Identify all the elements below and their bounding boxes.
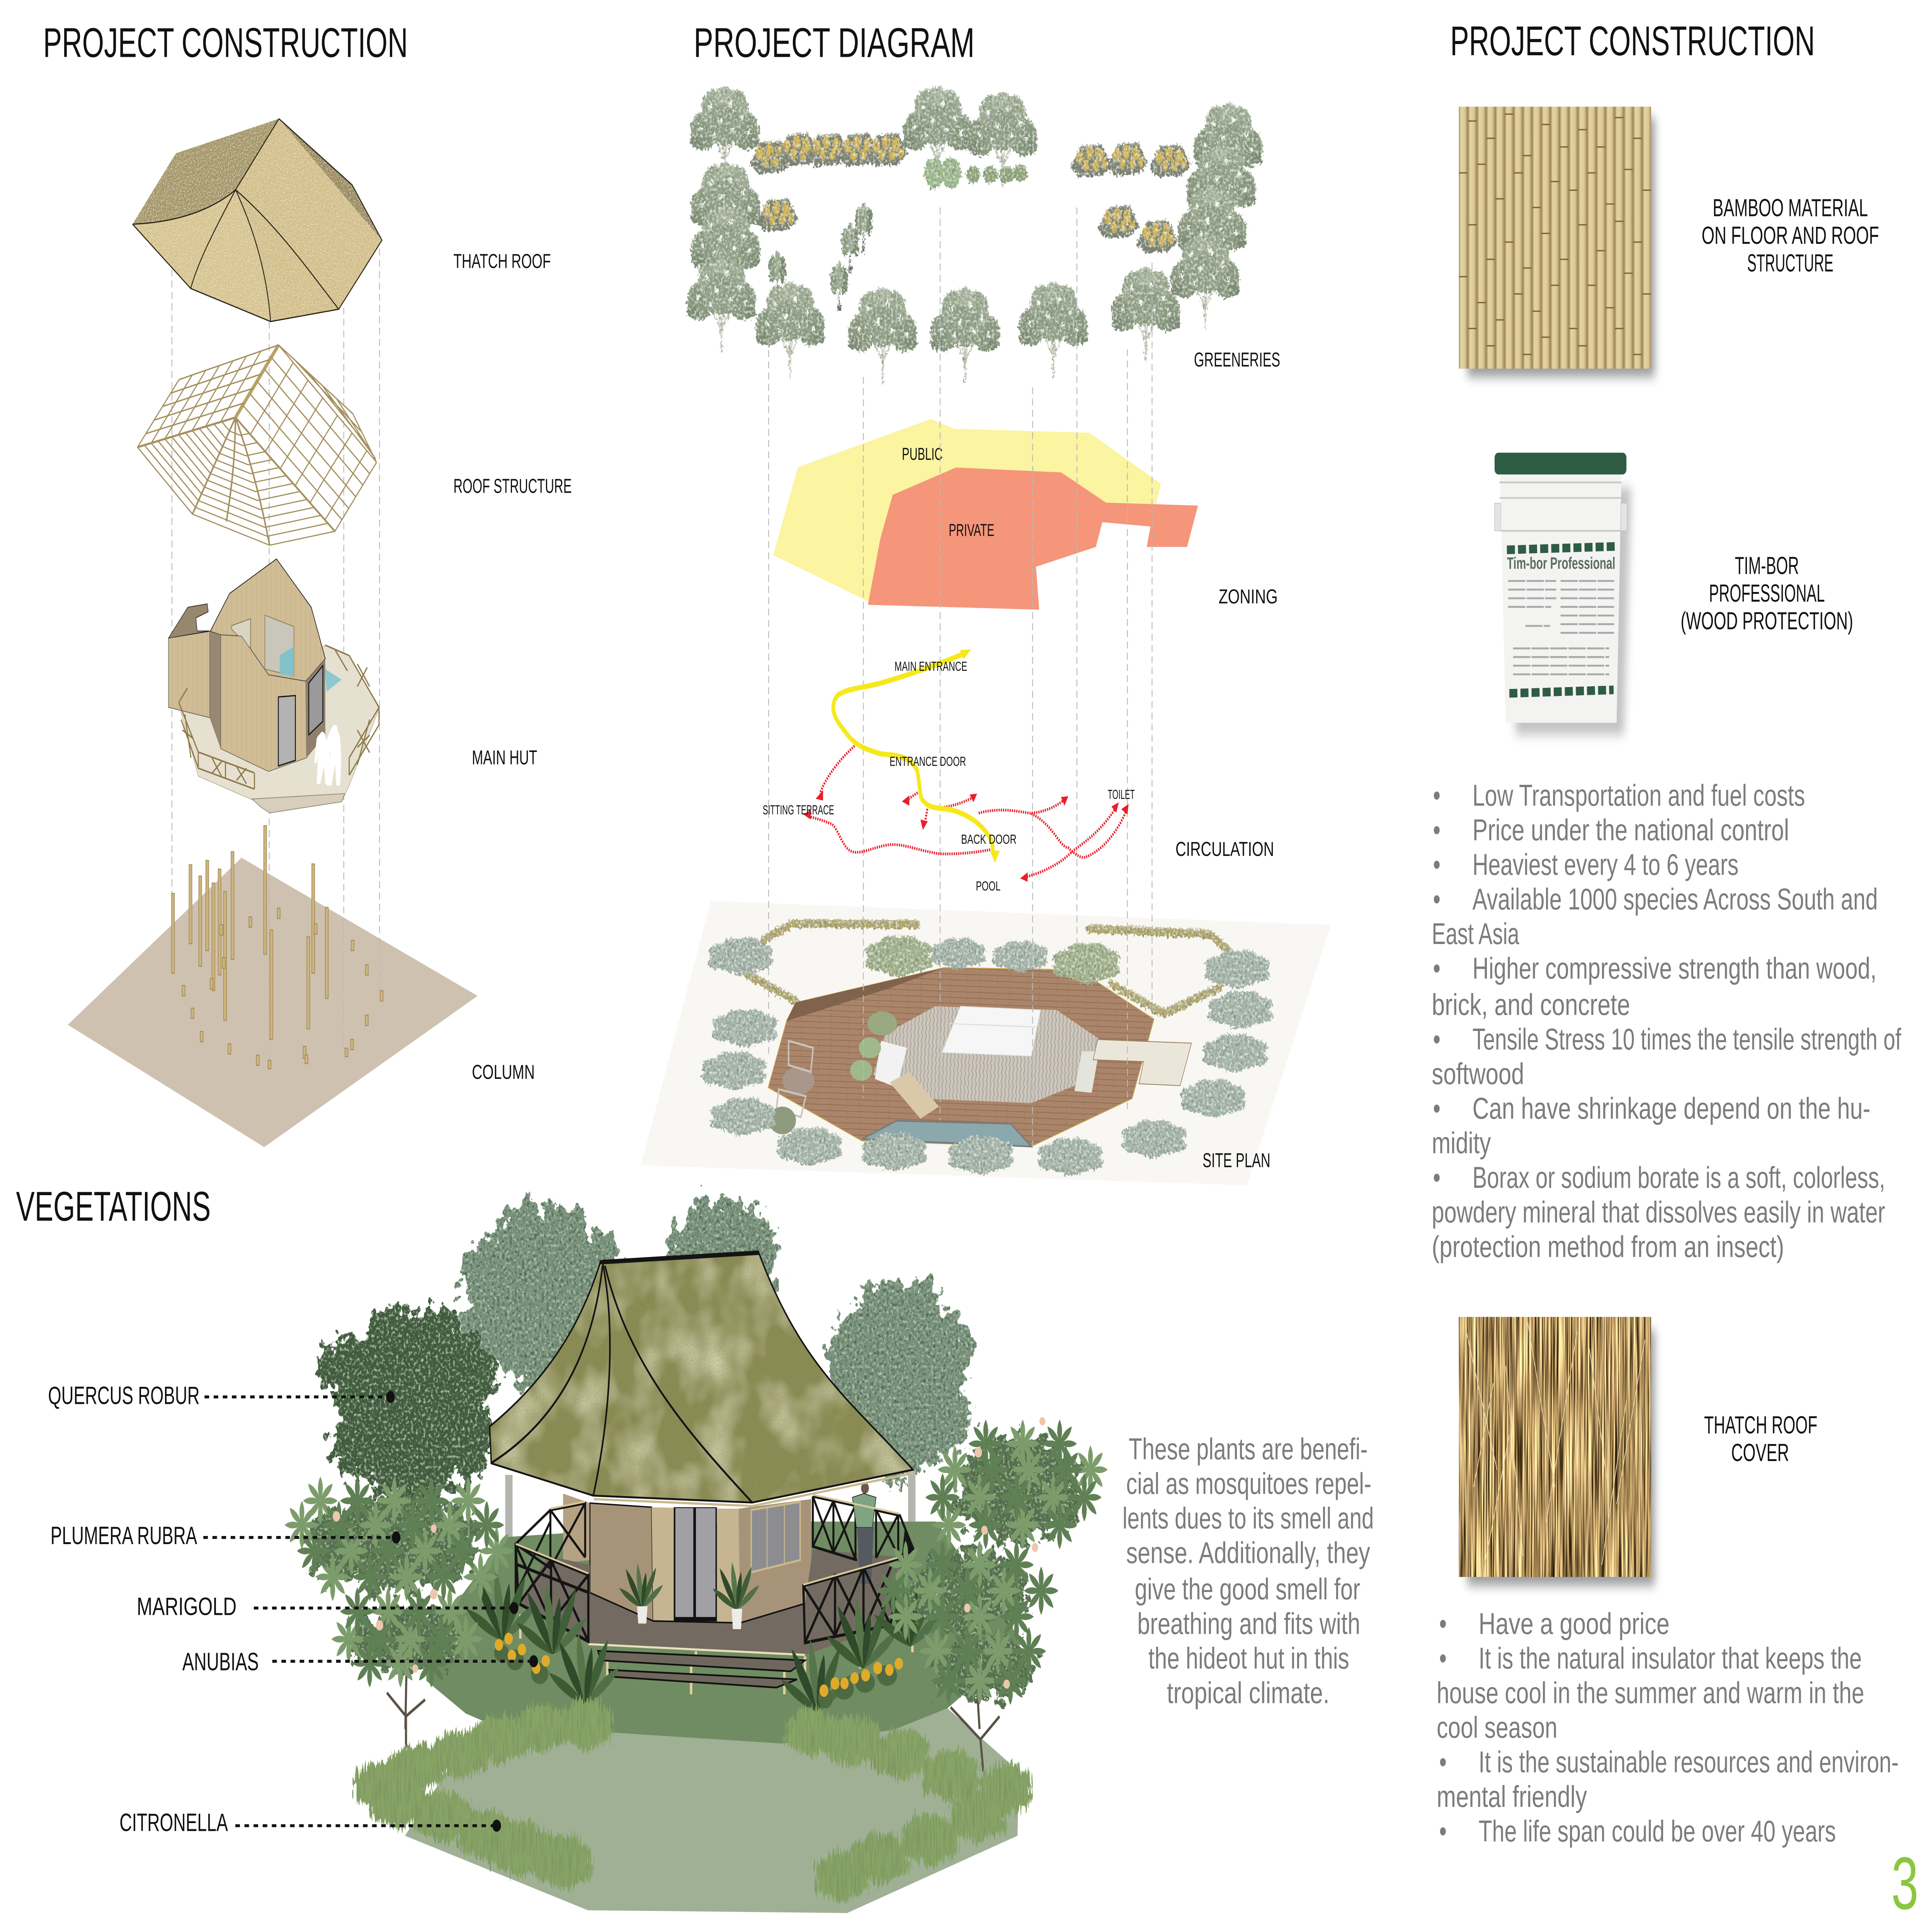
- text block: bamboo properties: East Asia: [1432, 917, 1519, 951]
- pool: [862, 1121, 1031, 1146]
- label: bamboo material: BAMBOO MATERIAL: [1713, 194, 1868, 221]
- railing cap: [516, 1495, 903, 1585]
- circulation: yellow main route: [833, 649, 1000, 863]
- text block: bamboo properties: •: [1433, 951, 1440, 985]
- stilts: [520, 1614, 912, 1694]
- text block: plants description: breathing and fits with: [1137, 1607, 1360, 1641]
- text block: bamboo properties: Available 1000 species Across South and: [1473, 882, 1878, 916]
- greeneries layer: [687, 86, 1263, 383]
- text block: thatch properties: •: [1439, 1745, 1447, 1779]
- text block: plants description: give the good smell for: [1135, 1572, 1360, 1606]
- text block: thatch properties: It is the natural insulator that keeps the: [1479, 1641, 1862, 1675]
- zoning shapes: PUBLIC: [902, 445, 942, 464]
- text block: thatch properties: Have a good price: [1479, 1607, 1670, 1641]
- label: tim-bor professional: (WOOD PROTECTION): [1680, 607, 1853, 635]
- circulation labels: ENTRANCE DOOR: [889, 754, 966, 769]
- steps: [598, 1651, 805, 1687]
- label: circulation: CIRCULATION: [1175, 839, 1274, 860]
- text block: bamboo properties: brick, and concrete: [1432, 988, 1630, 1022]
- text block: bamboo properties: •: [1433, 1022, 1440, 1056]
- title: project diagram: PROJECT DIAGRAM: [694, 20, 975, 66]
- text block: bamboo properties: (protection method from an insect): [1432, 1230, 1784, 1264]
- column ground plane: [68, 858, 478, 1147]
- text block: thatch properties: It is the sustainable resources and environ-: [1479, 1745, 1899, 1779]
- label: column: COLUMN: [472, 1061, 535, 1084]
- diagram guide lines: [769, 208, 1152, 1146]
- circulation labels: TOILET: [1108, 787, 1135, 802]
- people silhouettes: [314, 725, 341, 786]
- title: project construction right: PROJECT CONSTRUCTION: [1450, 18, 1815, 64]
- text block: plants description: cial as mosquitoes repel-: [1126, 1467, 1371, 1500]
- label: zoning: ZONING: [1219, 586, 1278, 608]
- bathroom: [1093, 1039, 1192, 1086]
- text block: bamboo properties: powdery mineral that dissolves easily in water: [1432, 1195, 1885, 1229]
- furniture: [769, 1012, 1099, 1134]
- shrubs: [701, 936, 1273, 1175]
- label: thatch roof cover: COVER: [1731, 1439, 1789, 1466]
- text block: plants description: lents dues to its smell and: [1122, 1501, 1374, 1535]
- leaf rosettes: [285, 1420, 1108, 1705]
- text block: bamboo properties: Borax or sodium borate is a soft, colorless,: [1473, 1161, 1885, 1194]
- callout: anubias: ANUBIAS: [182, 1648, 259, 1675]
- quercus tree: [318, 1305, 495, 1511]
- label: thatch roof: THATCH ROOF: [453, 251, 551, 272]
- text block: thatch properties: [1437, 1607, 1899, 1848]
- columns: [172, 825, 383, 1069]
- circulation labels: BACK DOOR: [961, 832, 1017, 847]
- label: tim-bor professional: [1680, 552, 1853, 635]
- rug: [874, 1006, 1100, 1103]
- site plan paper: [641, 901, 1331, 1185]
- text block: bamboo properties: Heaviest every 4 to 6 years: [1473, 848, 1738, 881]
- plumeria blossoms: [333, 1417, 1045, 1689]
- callout: quercus robur: [48, 1381, 395, 1409]
- person: [852, 1483, 876, 1584]
- panel: vegetation render: [48, 1199, 1108, 1913]
- text block: thatch properties: house cool in the summer and warm in the: [1437, 1676, 1864, 1710]
- callout: anubias: [182, 1648, 538, 1675]
- material: bamboo swatch: [1459, 107, 1655, 377]
- label: thatch roof cover: THATCH ROOF: [1704, 1411, 1817, 1439]
- exploded guide lines: [172, 248, 379, 1069]
- potted plants: [618, 1562, 761, 1629]
- circulation labels: [763, 659, 1135, 893]
- hedges: [745, 923, 1233, 1014]
- thatch roof: [133, 119, 382, 321]
- callout: citronella: [119, 1808, 501, 1836]
- circulation labels: MAIN ENTRANCE: [895, 659, 967, 674]
- text block: bamboo properties: •: [1433, 848, 1440, 881]
- pool glimpse: [325, 669, 342, 692]
- hut: [490, 1253, 914, 1694]
- callout: quercus robur: QUERCUS ROBUR: [48, 1381, 200, 1409]
- text block: bamboo properties: softwood: [1432, 1057, 1524, 1091]
- door: [651, 1507, 740, 1623]
- background trunks: [509, 1470, 912, 1542]
- thatch roof olive: [490, 1253, 913, 1502]
- text block: plants description: the hideot hut in this: [1148, 1641, 1349, 1675]
- label: tim-bor professional: TIM-BOR: [1735, 552, 1799, 579]
- label: site plan: SITE PLAN: [1202, 1150, 1270, 1172]
- text block: bamboo properties: •: [1433, 813, 1440, 847]
- material: tim-bor bucket: [1495, 452, 1631, 735]
- text block: plants description: [1122, 1432, 1374, 1710]
- text block: thatch properties: •: [1439, 1607, 1447, 1641]
- text block: plants description: tropical climate.: [1167, 1676, 1330, 1710]
- front railings: [516, 1545, 903, 1643]
- text block: thatch properties: •: [1439, 1814, 1447, 1848]
- text block: bamboo properties: •: [1433, 882, 1440, 916]
- text block: bamboo properties: [1432, 779, 1901, 1264]
- site plan: [641, 901, 1331, 1185]
- citronella hedges: [354, 1699, 1032, 1903]
- text block: plants description: These plants are benefi-: [1129, 1432, 1368, 1466]
- circulation: red arrowheads: [803, 790, 1129, 882]
- deck: [517, 1549, 903, 1655]
- foreground plants and marigold: [464, 1568, 947, 1716]
- window: [751, 1502, 800, 1572]
- text block: bamboo properties: Can have shrinkage depend on the hu-: [1473, 1092, 1871, 1125]
- label: main hut: MAIN HUT: [472, 747, 537, 769]
- label: bamboo material: ON FLOOR AND ROOF: [1702, 221, 1879, 249]
- label: tim-bor professional: PROFESSIONAL: [1709, 580, 1825, 607]
- text block: thatch properties: cool season: [1437, 1711, 1558, 1744]
- hut walls: [590, 1499, 811, 1623]
- text block: bamboo properties: Price under the national control: [1473, 813, 1789, 847]
- callout: plumera rubra: PLUMERA RUBRA: [51, 1521, 197, 1550]
- zoning shapes: PRIVATE: [949, 521, 994, 540]
- zoning shapes: [773, 419, 1198, 610]
- title: project construction left: PROJECT CONSTRUCTION: [43, 20, 408, 66]
- roof structure: [138, 345, 376, 545]
- text block: plants description: sense. Additionally, they: [1126, 1536, 1370, 1570]
- circulation labels: POOL: [976, 879, 1000, 893]
- text block: bamboo properties: midity: [1432, 1126, 1491, 1160]
- circulation: red routes: [808, 744, 1126, 877]
- text block: bamboo properties: •: [1433, 1092, 1440, 1125]
- foliage mass: [310, 1434, 1080, 1701]
- material: tim-bor bucket: Tim-bor Professional: [1507, 554, 1615, 572]
- roof ridges: [490, 1253, 913, 1502]
- exploded drawing: [68, 119, 478, 1147]
- label: bamboo material: STRUCTURE: [1747, 249, 1833, 277]
- rear railings: [516, 1496, 914, 1603]
- text block: bamboo properties: Tensile Stress 10 times the tensile strength of: [1473, 1022, 1901, 1056]
- lawn dark: [426, 1522, 1023, 1744]
- circulation labels: SITTING TERRACE: [763, 803, 834, 818]
- hut deck: [179, 645, 379, 802]
- panel: project diagram: [641, 86, 1331, 1185]
- text block: bamboo properties: •: [1433, 779, 1440, 812]
- callout: marigold: [137, 1592, 519, 1620]
- deck railings: [179, 645, 379, 789]
- label: roof structure: ROOF STRUCTURE: [453, 475, 572, 497]
- callout: plumera rubra: [51, 1521, 400, 1550]
- lawn light: [405, 1708, 1019, 1913]
- hut rear wall: [563, 1493, 590, 1563]
- plumeria trees: [285, 1417, 1108, 1772]
- text block: thatch properties: The life span could be over 40 years: [1479, 1814, 1836, 1848]
- panel: exploded axonometric: [68, 119, 572, 1147]
- text block: bamboo properties: •: [1433, 1161, 1440, 1194]
- trunks: [382, 1617, 1000, 1772]
- bed: [942, 1006, 1041, 1056]
- callout: citronella: CITRONELLA: [119, 1808, 228, 1836]
- label: greeneries: GREENERIES: [1194, 349, 1280, 371]
- background trees: [460, 1199, 972, 1485]
- text block: thatch properties: mental friendly: [1437, 1780, 1587, 1813]
- main hut: [168, 559, 379, 813]
- text block: bamboo properties: Higher compressive strength than wood,: [1473, 951, 1877, 985]
- label: thatch roof cover: [1704, 1411, 1817, 1466]
- label: bamboo material: [1702, 194, 1879, 277]
- deck: [768, 968, 1154, 1146]
- text block: bamboo properties: Low Transportation and fuel costs: [1473, 779, 1805, 812]
- title: vegetations: VEGETATIONS: [16, 1183, 211, 1230]
- text block: thatch properties: •: [1439, 1641, 1447, 1675]
- callout: marigold: MARIGOLD: [137, 1592, 236, 1620]
- material: thatch swatch: [1459, 1317, 1655, 1585]
